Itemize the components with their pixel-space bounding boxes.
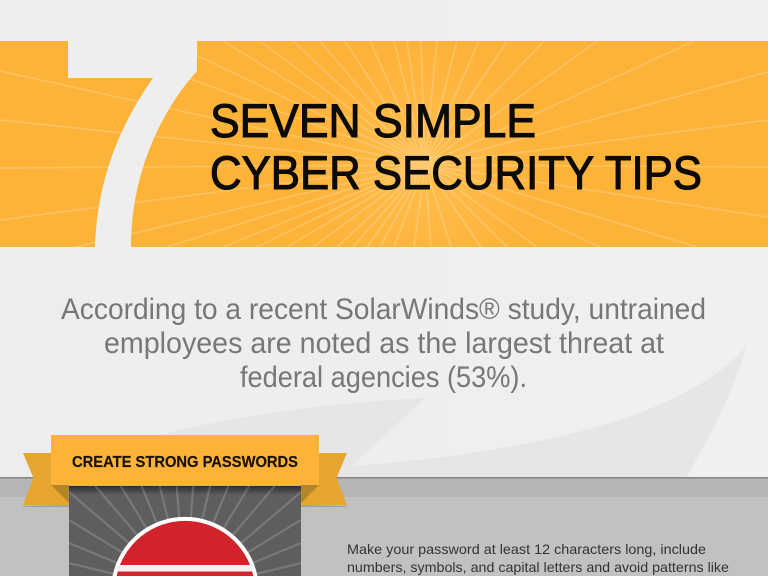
title: CYBER SECURITY TIPS: [210, 146, 702, 199]
header banner: [0, 41, 768, 247]
intro text: According to a recent SolarWinds® study, untrained: [61, 293, 706, 326]
sunburst rays: [0, 41, 768, 247]
sunburst background: [0, 41, 768, 247]
ribbon heading: [51, 435, 319, 485]
title: SEVEN SIMPLE: [210, 94, 536, 147]
ribbon heading: CREATE STRONG PASSWORDS: [72, 454, 298, 471]
dark icon panel: [69, 486, 301, 576]
tip body text: [347, 541, 729, 575]
section band: [0, 477, 768, 576]
intro text: federal agencies (53%).: [240, 361, 527, 394]
intro text: employees are noted as the largest threat at: [104, 327, 665, 360]
tip body text: numbers, symbols, and capital letters and avoid patterns like: [347, 559, 729, 575]
intro text: [61, 293, 706, 394]
icon: red circle: [112, 517, 258, 576]
title: [210, 94, 702, 199]
panel rays: [69, 486, 301, 576]
ribbon tails: [23, 453, 347, 507]
background swoosh: [150, 347, 746, 477]
big numeral 7 cut-out: [68, 41, 197, 247]
tip body text: Make your password at least 12 characters long, include: [347, 541, 706, 557]
